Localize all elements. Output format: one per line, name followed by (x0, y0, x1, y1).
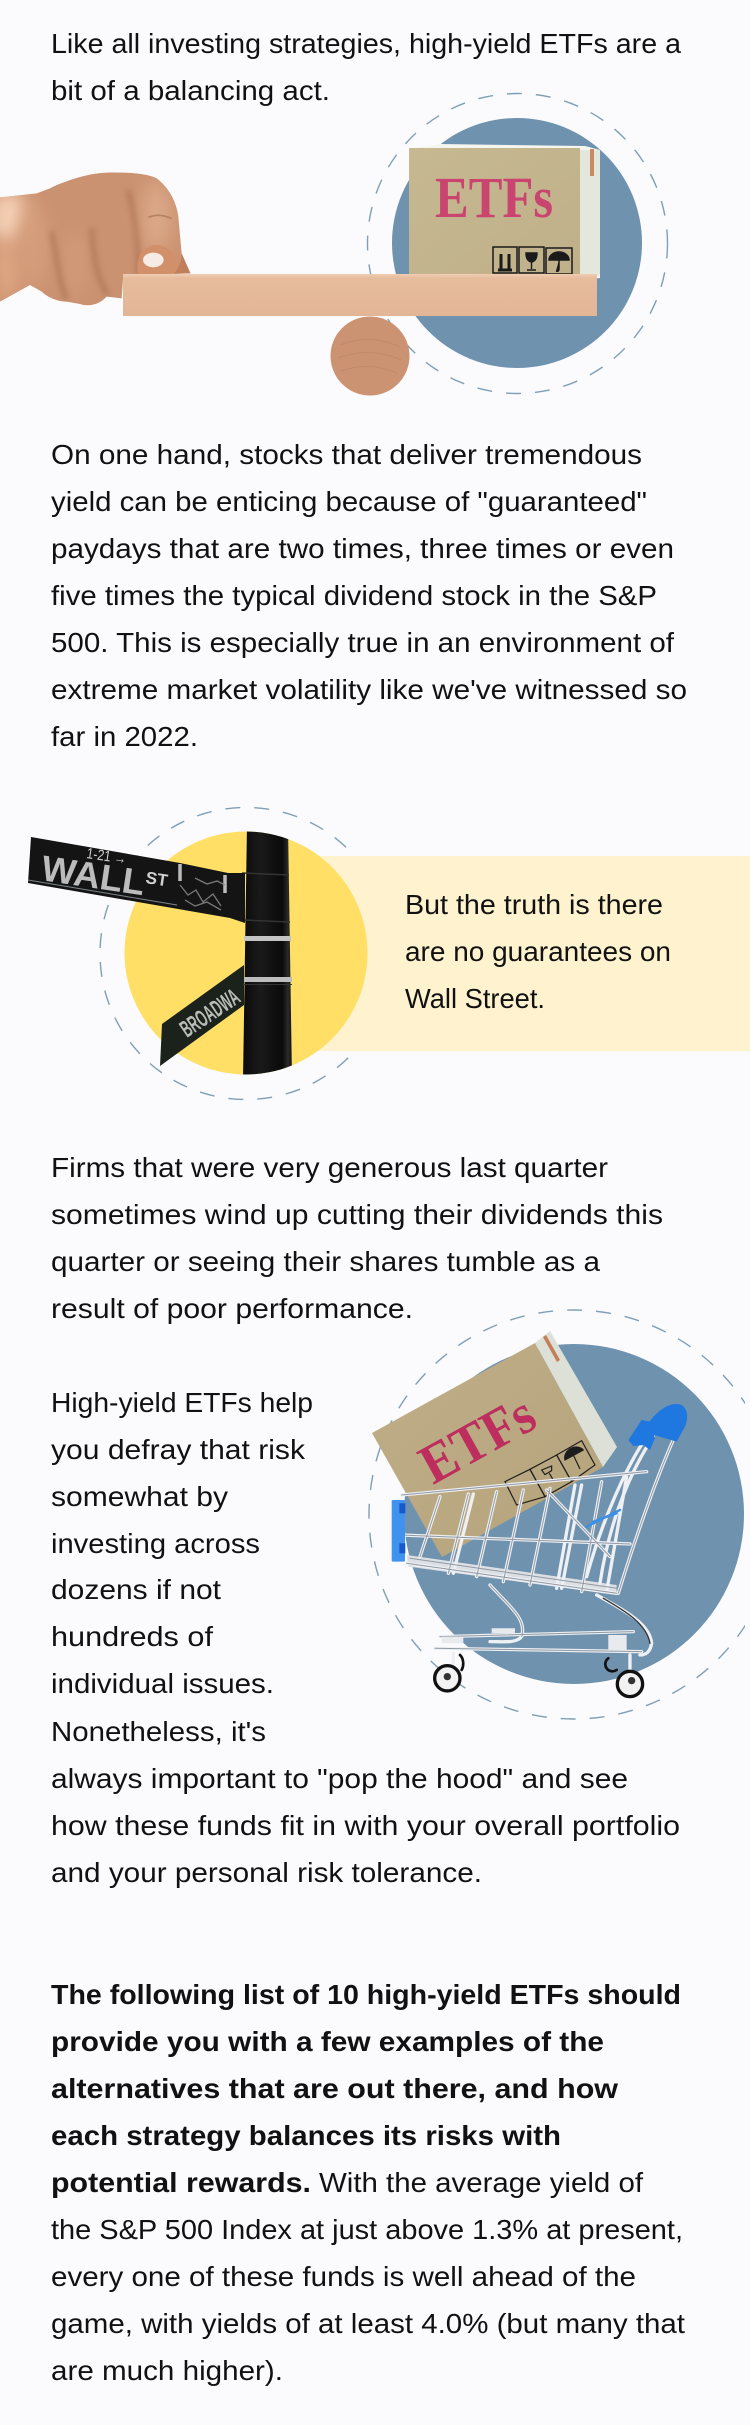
icon: ETFs cardboard box (409, 144, 600, 281)
text block: the following list: With the average yield of (319, 2167, 643, 2198)
callout text (405, 889, 671, 1014)
callout text: But the truth is there (405, 889, 663, 920)
dashed ring (369, 1310, 750, 1719)
text block: on one hand: On one hand, stocks that deliver tremendous (51, 439, 642, 470)
bold lead sentence: potential rewards. (51, 2167, 311, 2198)
text block: on one hand: 500. This is especially true in an environment of (51, 627, 674, 658)
cart base plate (407, 1555, 617, 1595)
icon: Broadway sign (160, 965, 245, 1066)
icon: tilted ETFs box (372, 1331, 617, 1557)
bold lead sentence (51, 1979, 681, 2198)
text block: generous firms: quarter or seeing their shares tumble as a (51, 1246, 600, 1277)
icon: Wall St sign: WALL (39, 847, 148, 903)
icon: Broadway sign: BROADWA (175, 984, 245, 1043)
text block: defray risk wrapped around cart: you defray that risk (51, 1434, 306, 1465)
icon: Wall St sign: 1-21 → (85, 845, 127, 868)
text block: generous firms: Firms that were very generous last quarter (51, 1152, 608, 1183)
text block: the following list: every one of these funds is well ahead of the (51, 2261, 636, 2292)
icon: round fulcrum (330, 316, 410, 396)
box label: ETFs (409, 1383, 546, 1496)
text block: on one hand: extreme market volatility like we've witnessed so (51, 674, 687, 705)
icon: Wall St sign (28, 837, 245, 923)
bold lead sentence: each strategy balances its risks with (51, 2120, 561, 2151)
callout text: Wall Street. (405, 983, 545, 1014)
icon: hand (0, 172, 190, 306)
text block: generous firms (51, 1152, 663, 1324)
dashed ring (368, 94, 668, 394)
text block: generous firms: sometimes wind up cutting their dividends this (51, 1199, 663, 1230)
text block: balancing act intro: bit of a balancing act. (51, 75, 330, 106)
icon: shopping cart (392, 1404, 687, 1697)
text block: the following list: are much higher). (51, 2355, 283, 2386)
box label: ETFs (435, 165, 553, 230)
blue circle (392, 118, 642, 368)
blue front panel (392, 1500, 405, 1562)
wheels (435, 1666, 460, 1691)
text block: generous firms: result of poor performance. (51, 1293, 413, 1324)
cart lower brackets (442, 1628, 627, 1650)
text block: defray risk wrapped around cart: Nonetheless, it's (51, 1716, 266, 1747)
illustration: hand balancing ETF box on a seesaw (0, 94, 668, 396)
icon: Wall St sign: ST (144, 868, 170, 890)
text block: defray risk wrapped around cart: how these funds fit in with your overall portfolio (51, 1810, 680, 1841)
text block: defray risk wrapped around cart: always important to "pop the hood" and see (51, 1763, 628, 1794)
cart wires (400, 1437, 673, 1673)
panel: Wall Street callout (28, 808, 750, 1100)
text block: the following list: game, with yields of at least 4.0% (but many that (51, 2308, 685, 2339)
text block: on one hand: yield can be enticing because of "guaranteed" (51, 486, 647, 517)
text block: on one hand (51, 439, 687, 752)
bold lead sentence: The following list of 10 high-yield ETFs should (51, 1979, 681, 2010)
plank (123, 274, 597, 316)
text block: defray risk wrapped around cart: and your personal risk tolerance. (51, 1857, 482, 1888)
text block: defray risk wrapped around cart: investing across (51, 1528, 260, 1559)
text block: balancing act intro (51, 28, 681, 106)
text block: defray risk wrapped around cart (51, 1387, 680, 1888)
text block: balancing act intro: Like all investing strategies, high-yield ETFs are a (51, 28, 681, 59)
blue handle (648, 1404, 687, 1442)
callout band (310, 856, 750, 1051)
text block: defray risk wrapped around cart: hundreds of (51, 1621, 213, 1652)
text block: defray risk wrapped around cart: dozens if not (51, 1574, 221, 1605)
text block: the following list (51, 1979, 685, 2386)
bold lead sentence: alternatives that are out there, and how (51, 2073, 618, 2104)
text block: on one hand: far in 2022. (51, 721, 198, 752)
text block: defray risk wrapped around cart: somewhat by (51, 1481, 228, 1512)
illustration: ETF box in shopping cart (369, 1310, 750, 1719)
dashed ring (100, 808, 392, 1100)
text block: defray risk wrapped around cart: High-yield ETFs help (51, 1387, 313, 1418)
callout text: are no guarantees on (405, 936, 671, 967)
blue circle (404, 1344, 744, 1684)
bold lead sentence: provide you with a few examples of the (51, 2026, 604, 2057)
text block: defray risk wrapped around cart: individual issues. (51, 1668, 274, 1699)
icon: street pole (242, 825, 292, 1080)
text block: the following list: the S&P 500 Index at just above 1.3% at present, (51, 2214, 683, 2245)
yellow circle (124, 832, 368, 1074)
text block: on one hand: five times the typical dividend stock in the S&P (51, 580, 657, 611)
icon: handling marks (505, 1441, 595, 1505)
text block: on one hand: paydays that are two times, three times or even (51, 533, 674, 564)
icon: handling marks (493, 247, 572, 274)
